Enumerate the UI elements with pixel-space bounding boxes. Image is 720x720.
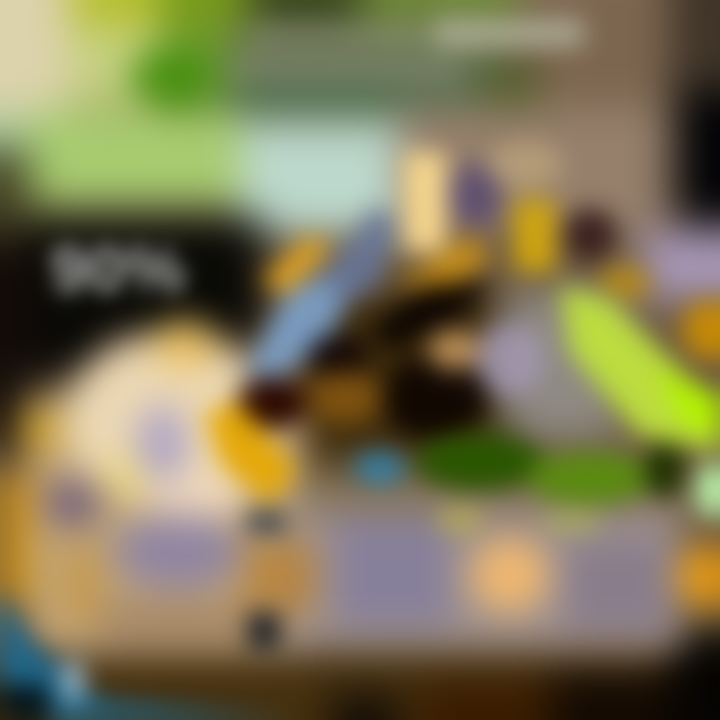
green leaf patch, top left: [130, 50, 210, 106]
snake: coiled body: [0, 321, 720, 650]
snake: head and neck bands: [205, 141, 720, 650]
blue accent by leaf: [354, 452, 406, 484]
green leaves: [416, 285, 720, 534]
big stat text, blurred: 90%: [50, 232, 186, 306]
heading: illegible blurred title lines: [230, 18, 584, 82]
blue cloth, bottom left: [0, 590, 300, 720]
